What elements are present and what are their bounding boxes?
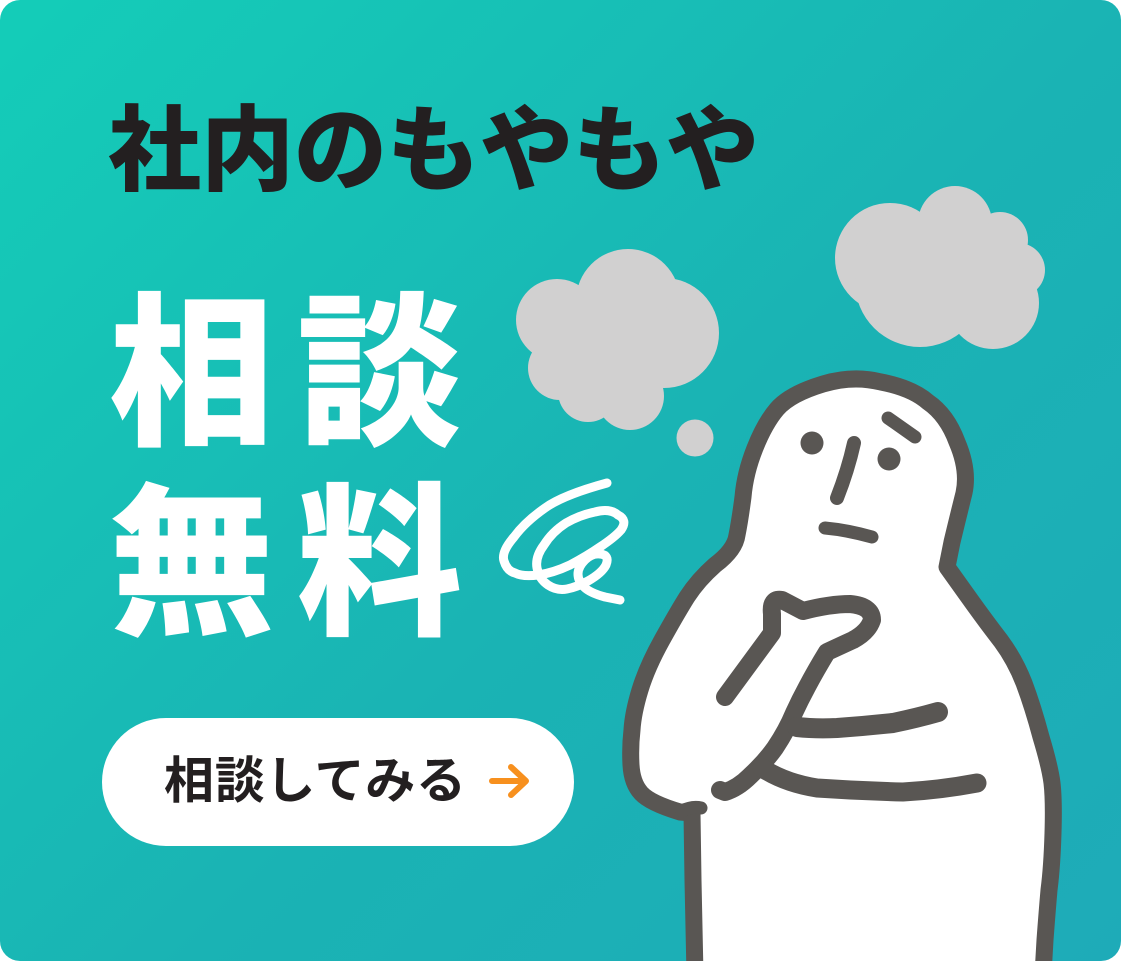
person arm lower line (762, 768, 977, 792)
headline: muryou: 無料 (109, 473, 485, 657)
person body (631, 379, 1053, 961)
button label: 相談してみる (164, 753, 467, 809)
thought cloud left (516, 249, 719, 430)
shoulder nub (682, 807, 701, 811)
icon: arrow (489, 764, 529, 798)
thought bubble small (676, 420, 714, 456)
person eyebrow (888, 418, 915, 437)
person arm upper line (797, 712, 938, 728)
button (102, 718, 574, 846)
person hand and arm (720, 600, 872, 792)
person mouth (825, 528, 872, 537)
headline: soudan: 相談 (109, 283, 485, 467)
person nose (837, 443, 854, 498)
person eyes (800, 432, 900, 470)
person (631, 379, 1053, 961)
heading: 社内のもやもや (108, 99, 759, 203)
thought cloud right (835, 186, 1045, 349)
scribble (503, 483, 624, 600)
